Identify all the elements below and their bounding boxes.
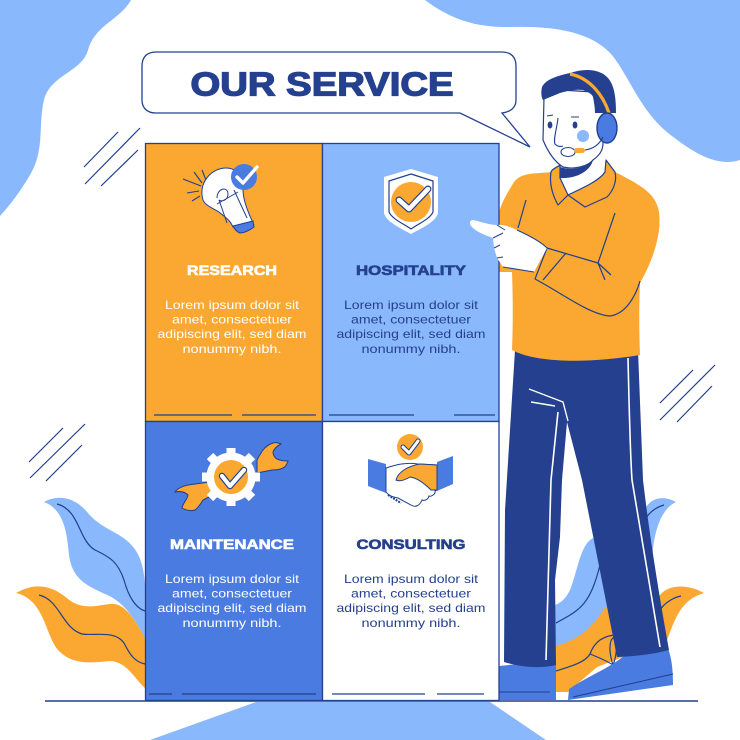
text: hospitality body: Lorem ipsum dolor sit [344,298,479,312]
head [543,90,604,168]
text: maintenance body: amet, consectetuer [172,586,292,600]
background blob: top right [425,0,740,162]
icon: shield [384,169,438,234]
text: consulting body: amet, consectetuer [351,586,471,600]
text: hospitality body: amet, consectetuer [351,312,471,326]
text: research body: nonummy nibh. [182,342,282,356]
sweater [497,168,660,361]
background shape: bottom triangle [150,702,546,740]
man: pointing hand [470,220,547,272]
heading: maintenance: MAINTENANCE [170,537,294,552]
text: consulting body: nonummy nibh. [362,616,460,630]
text: maintenance body: Lorem ipsum dolor sit [165,572,300,586]
headset band [570,74,609,113]
beard [560,160,593,178]
text: research body: adipiscing elit, sed diam [158,327,306,341]
panel: maintenance [146,422,322,700]
hair [541,70,616,113]
right shoe [568,648,673,700]
text: consulting body: Lorem ipsum dolor sit [344,572,479,586]
heading: research: RESEARCH [187,263,277,278]
text: research body: amet, consectetuer [172,312,292,326]
service grid [146,144,499,700]
text: maintenance body: adipiscing elit, sed diam [158,601,306,615]
background blob: top left [0,0,131,216]
text: hospitality body: adipiscing elit, sed diam [336,327,486,341]
icon: light bulb [183,164,257,233]
left shoe [499,660,556,700]
trousers [504,350,669,667]
right leaves [555,498,704,692]
icon: gear and wrench [175,443,288,511]
man: body [497,70,673,700]
heading: hospitality: HOSPITALITY [356,263,466,278]
text: hospitality body: nonummy nibh. [362,342,460,356]
decorative lines [29,128,715,481]
trouser stripes [546,358,660,660]
left leaves [16,498,146,689]
panel: consulting [322,422,499,700]
text: research body: Lorem ipsum dolor sit [165,298,300,312]
panel: research [146,144,322,422]
collar [550,160,616,207]
title: OUR SERVICE [190,66,454,102]
neck [559,145,606,195]
panel: hospitality [322,144,499,422]
text: consulting body: adipiscing elit, sed diam [336,601,486,615]
text: maintenance body: nonummy nibh. [182,616,282,630]
icon: handshake [368,434,453,506]
trouser pockets [529,389,568,421]
face details [547,115,603,156]
earcup [597,113,617,143]
heading: consulting: CONSULTING [356,537,466,552]
sweater lines [518,200,640,316]
speech bubble [142,52,530,147]
ground line [45,700,698,702]
